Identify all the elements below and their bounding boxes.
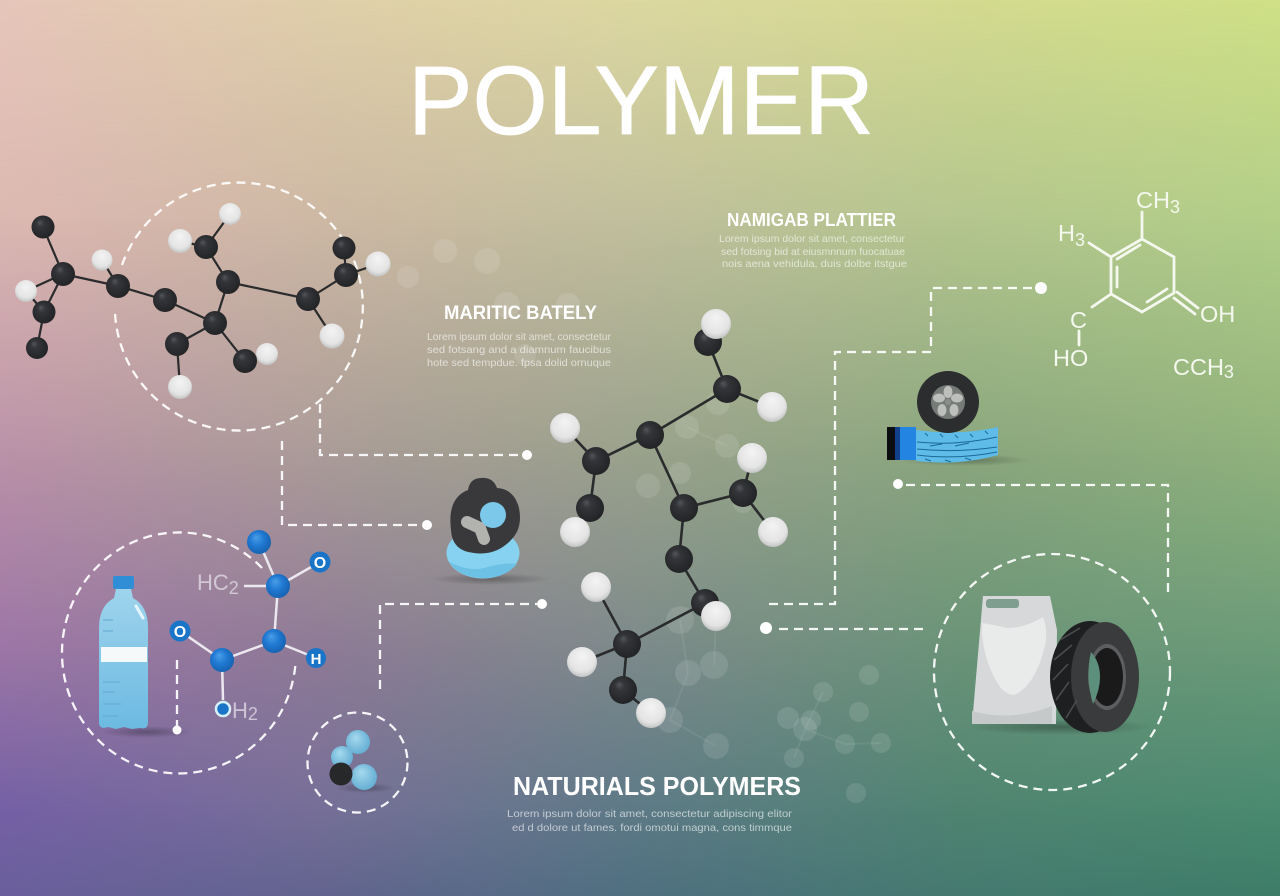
icon: hexagon chemical formula: H: [1058, 220, 1075, 246]
icon: upright tire: [917, 371, 979, 433]
connector: hexagon: [769, 282, 1047, 604]
text block: Maritic Bately: MARITIC BATELY: [444, 303, 597, 324]
text block: Maritic Bately: hote sed tempdue. fpsa dolid ornuque: [427, 357, 611, 369]
icon: hexagon chemical formula: CH: [1136, 187, 1170, 213]
atom O: O: [314, 555, 326, 572]
atom O: [310, 552, 330, 572]
connector: molecule to centre: [320, 404, 532, 460]
connector: small molecule: [380, 599, 547, 689]
icon: hexagon chemical formula: [1053, 187, 1235, 382]
atom H: H: [311, 651, 321, 668]
icon: polymer clump in bowl: [430, 478, 550, 585]
blue molecule formula: [170, 530, 330, 724]
text block: Namigab Plattier: [719, 210, 907, 270]
icon: white bag and black tire: [965, 596, 1155, 735]
text block: Maritic Bately: [427, 303, 611, 369]
faint background molecules: [397, 239, 891, 803]
icon: hexagon chemical formula: C: [1070, 307, 1087, 333]
atom O left: O: [174, 624, 186, 641]
dashed circle: small molecule: [308, 712, 408, 812]
icon: hexagon chemical formula: 3: [1224, 362, 1234, 382]
blue molecule formula: 2: [229, 578, 239, 598]
bottle connector: [172, 660, 182, 734]
text block: Namigab Plattier: sed fotsing bid at eiusmnnum fuocatuae: [721, 246, 905, 258]
icon: hexagon chemical formula: 3: [1170, 197, 1180, 217]
icon: white bag: [972, 596, 1057, 724]
connector: bag and tire: [760, 622, 925, 634]
atom O lower: [216, 702, 230, 716]
text block: Namigab Plattier: Lorem ipsum dolor sit amet, consectetur: [719, 233, 905, 245]
text block: Naturials Polymers: ed d dolore ut fames. fordi omotui magna, cons timmque: [512, 822, 792, 834]
text block: Naturials Polymers: [507, 771, 801, 834]
icon: small molecule: [330, 730, 395, 793]
connector: clump: [282, 441, 432, 530]
text block: Maritic Bately: Lorem ipsum dolor sit amet, consectetur: [427, 331, 611, 343]
icon: hexagon chemical formula: 3: [1075, 230, 1085, 250]
text block: Namigab Plattier: NAMIGAB PLATTIER: [727, 210, 896, 230]
atom O left: [170, 620, 190, 642]
blue molecule formula: H: [232, 698, 248, 723]
atom H: [306, 648, 326, 668]
main central molecule: [550, 309, 788, 728]
icon: hexagon chemical formula: HO: [1053, 345, 1088, 371]
icon: small tires: [887, 371, 1030, 466]
icon: flat blue tire: [887, 427, 998, 463]
icon: hexagon chemical formula: CCH: [1173, 354, 1224, 380]
icon: water bottle: [99, 576, 192, 738]
dashed circle: top-left molecule: [115, 183, 363, 431]
molecule: top-left: [15, 203, 390, 399]
dashed circle: bottle: [62, 532, 295, 773]
dark blob: [450, 478, 520, 553]
icon: black tire: [1050, 621, 1139, 733]
text block: Namigab Plattier: nois aena vehidula, duis dolbe itstgue: [722, 258, 907, 270]
dashed circle: bag and tire: [934, 554, 1170, 790]
blue molecule formula: 2: [248, 704, 258, 724]
connector: small tires: [893, 479, 1168, 597]
text block: Maritic Bately: sed fotsang and a diamnum faucibus: [427, 344, 611, 356]
blue molecule formula: HC: [197, 570, 229, 595]
text block: Naturials Polymers: NATURIALS POLYMERS: [513, 771, 801, 801]
text block: Naturials Polymers: Lorem ipsum dolor sit amet, consectetur adipiscing elitor: [507, 808, 793, 820]
title: POLYMER: [408, 46, 874, 155]
icon: hexagon chemical formula: OH: [1200, 301, 1235, 327]
